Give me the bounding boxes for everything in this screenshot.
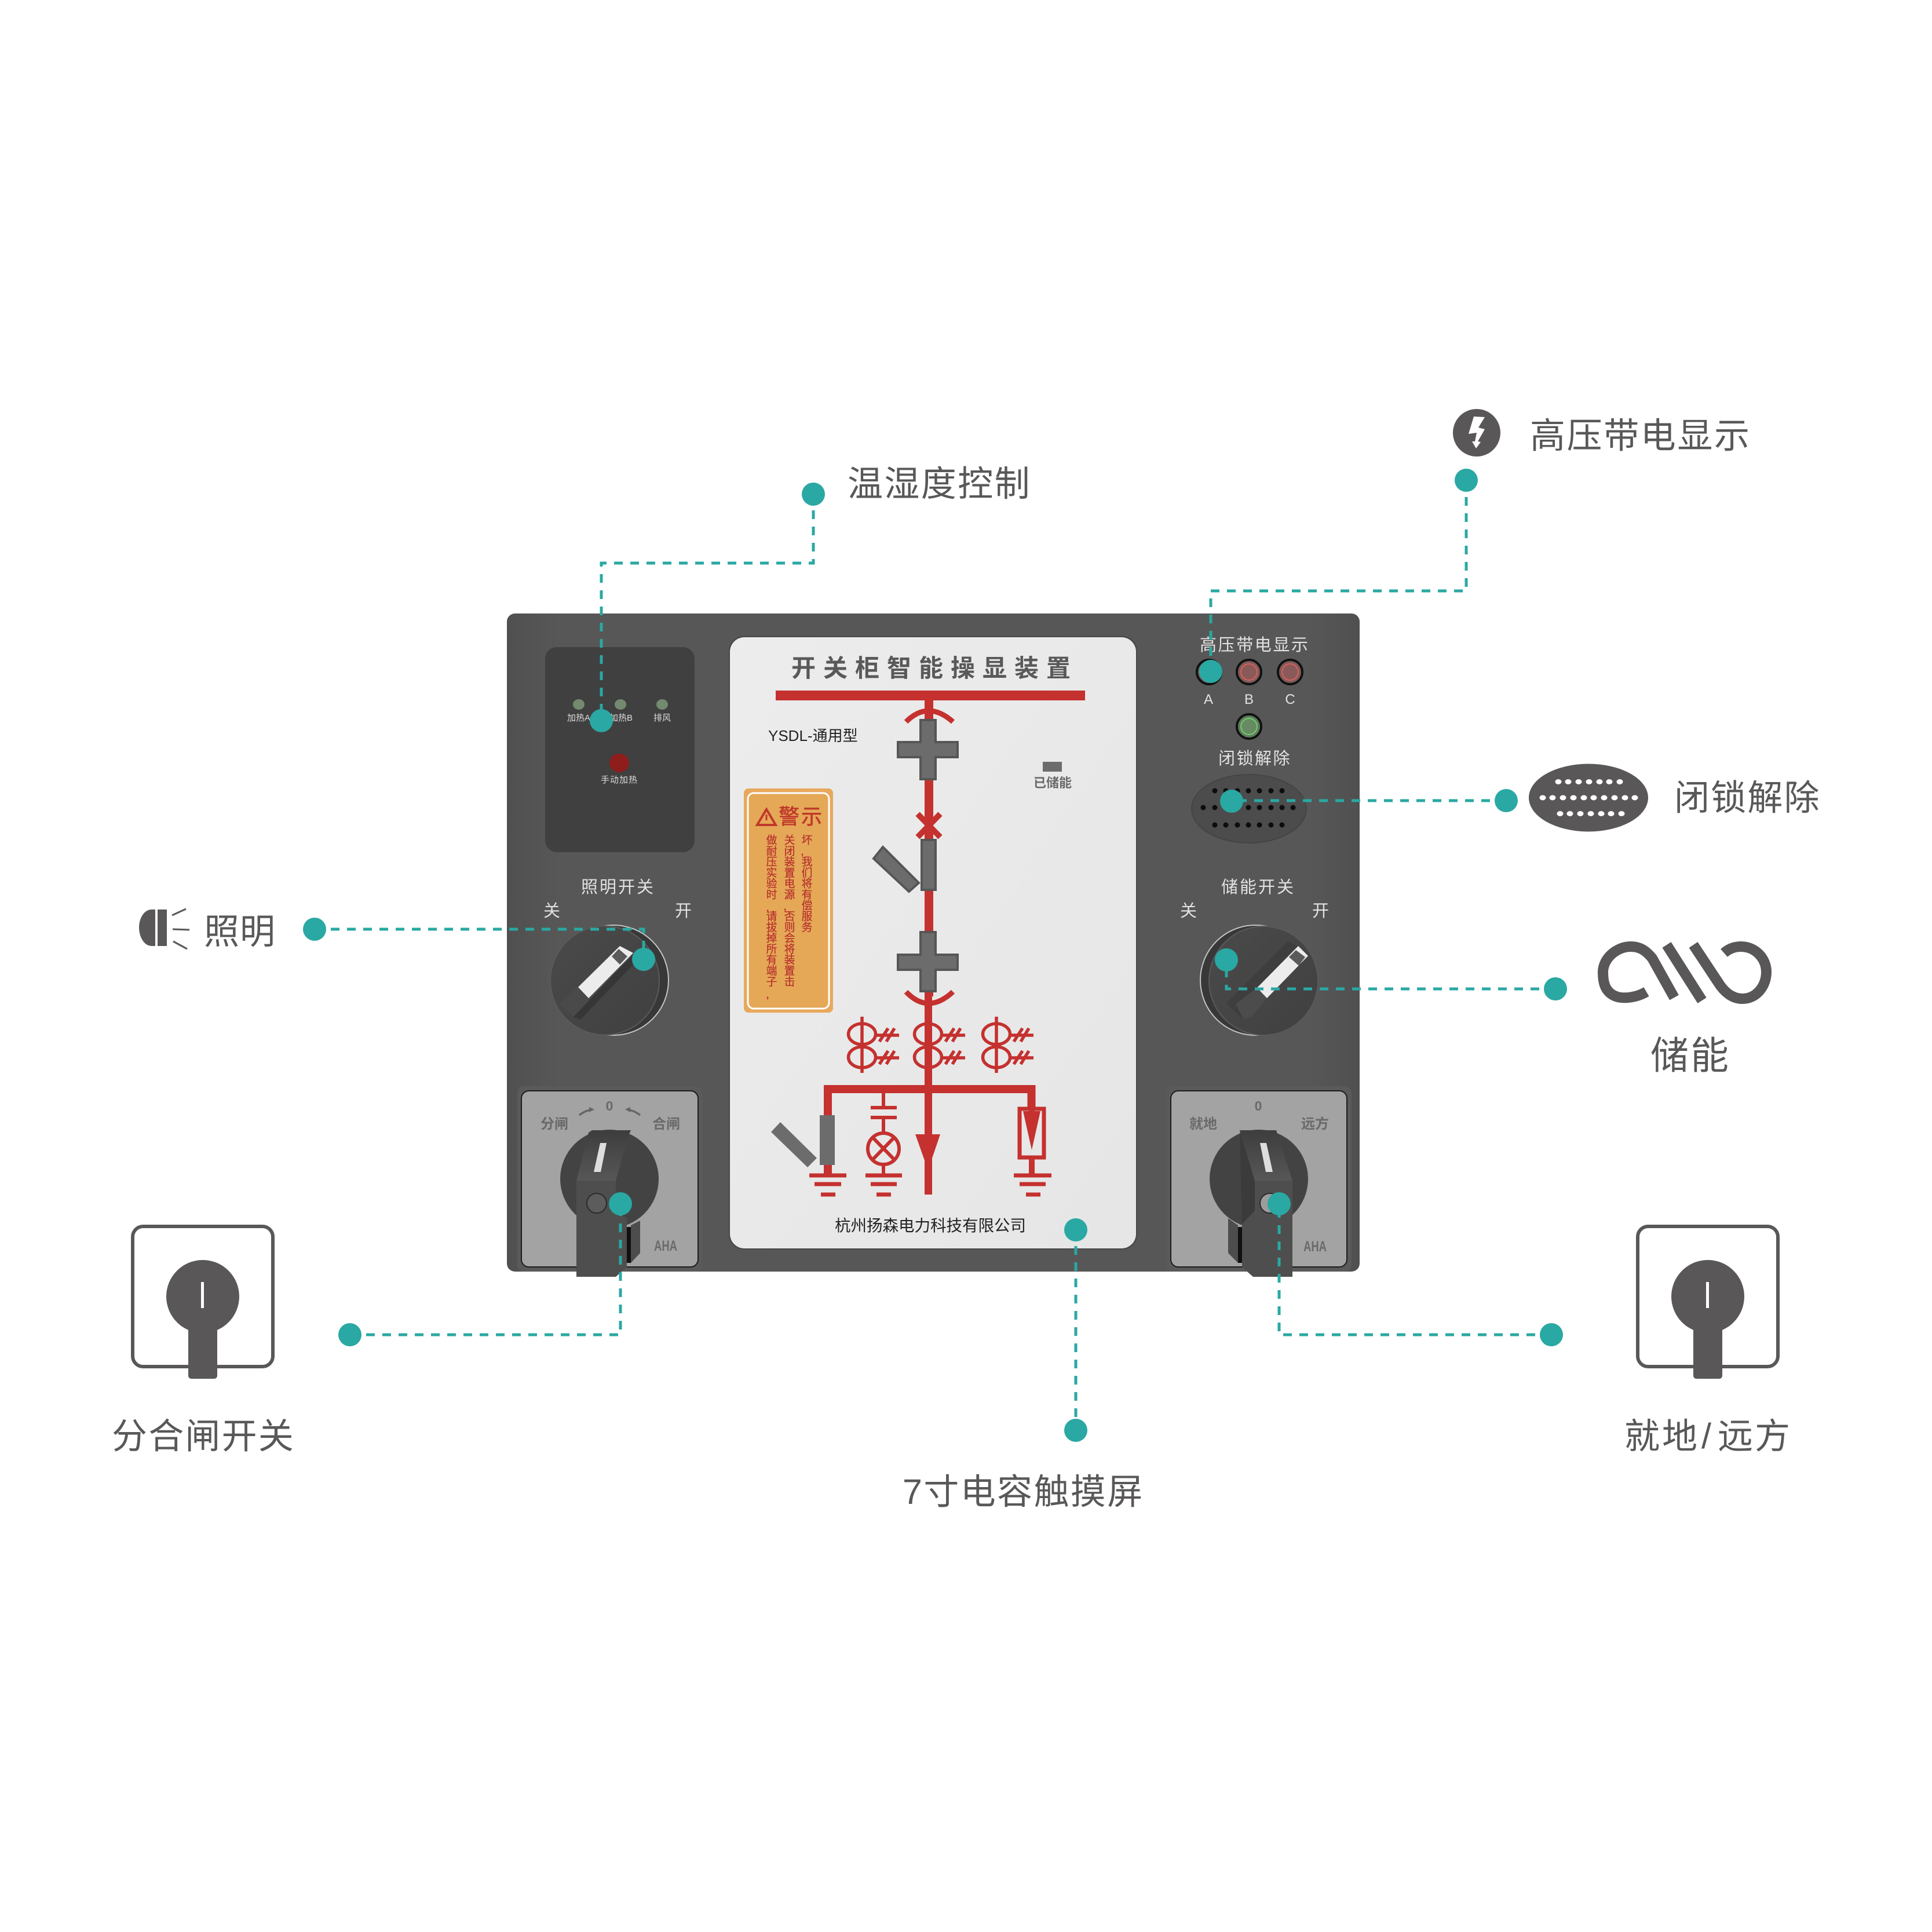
charged indicator: 已储能	[1033, 776, 1072, 790]
right plate: local/remote switch: 0	[1255, 1098, 1262, 1113]
energy storage switch captions: 储能开关	[1221, 878, 1295, 897]
company name: 杭州扬森电力科技有限公司	[835, 1217, 1026, 1235]
charged indicator	[1033, 762, 1072, 790]
label: temperature humidity control: 温湿度控制	[848, 464, 1031, 503]
icon: energy storage	[1603, 945, 1766, 1000]
warning label: ,	[784, 901, 786, 912]
warning label: 警示	[779, 805, 824, 828]
panel: heating control box	[545, 647, 695, 852]
right plate: local/remote switch: 远方	[1301, 1116, 1329, 1132]
right plate: local/remote switch: 就地	[1189, 1116, 1217, 1132]
current transformers	[848, 1017, 1033, 1073]
icon: lightning	[1453, 409, 1500, 456]
screen	[729, 636, 1137, 1250]
warning label: ,	[801, 846, 804, 857]
leader line: high voltage	[1211, 481, 1466, 671]
high-voltage indicator group	[1197, 636, 1310, 768]
panel: heating control box: 加热B	[609, 713, 633, 723]
label: touch screen: 7寸电容触摸屏	[903, 1472, 1144, 1511]
leader line: touch screen	[1074, 1230, 1078, 1430]
label: local remote: 就地/远方	[1624, 1416, 1790, 1456]
warning label: ,	[766, 903, 769, 914]
icon: lamp	[139, 909, 189, 949]
leader line: storage	[1226, 960, 1555, 989]
lighting switch captions	[543, 878, 692, 921]
warning label: 做耐压实验时 请拔掉所有端子	[765, 834, 777, 987]
panel: heating control box: 手动加热	[601, 775, 638, 785]
lighting switch captions: 关	[543, 901, 560, 921]
warning label: 坏 我们将有偿服务	[801, 834, 812, 932]
energy storage switch captions: 关	[1180, 901, 1197, 921]
high-voltage indicator group: C	[1285, 692, 1295, 707]
icon: switch right	[1638, 1226, 1778, 1379]
icon: switch left	[133, 1226, 273, 1379]
release socket	[1192, 775, 1306, 843]
energy storage switch captions: 开	[1312, 902, 1329, 921]
right plate: local/remote switch: AHA	[1303, 1239, 1327, 1255]
high-voltage indicator group: 闭锁解除	[1218, 749, 1291, 768]
high-voltage indicator group: B	[1244, 692, 1254, 707]
leader line: humidity control	[601, 494, 813, 721]
right plate: local/remote switch	[1166, 1086, 1352, 1277]
warning label: ,	[766, 989, 769, 1000]
left plate: open/close switch: 分闸	[540, 1116, 568, 1132]
high-voltage indicator group: A	[1204, 692, 1213, 707]
device panel	[507, 613, 1360, 1277]
model label: YSDL-通用型	[768, 727, 858, 744]
left plate: open/close switch: AHA	[654, 1238, 677, 1254]
lighting rotary knob	[550, 925, 669, 1035]
left plate: open/close switch: 合闸	[652, 1116, 680, 1132]
red bus bar	[776, 691, 1085, 700]
leader line: open/close	[350, 1204, 620, 1335]
label: open close switch: 分合闸开关	[112, 1416, 295, 1456]
energy storage switch captions	[1180, 878, 1329, 921]
high-voltage indicator group: 高压带电显示	[1200, 636, 1310, 655]
marker dots	[303, 469, 1567, 1442]
panel: heating control box: 排风	[653, 713, 671, 723]
label: high voltage display: 高压带电显示	[1530, 416, 1751, 455]
lighting switch captions: 开	[675, 902, 692, 921]
lighting switch captions: 照明开关	[581, 878, 655, 897]
leader line: release	[1232, 799, 1506, 802]
screen title: 开关柜智能操显装置	[791, 655, 1078, 682]
left plate: open/close switch	[517, 1086, 703, 1277]
label: release lock: 闭锁解除	[1674, 778, 1821, 817]
leader line: lighting	[315, 929, 644, 959]
panel: heating control box: 加热A	[567, 713, 590, 723]
leader line: local/remote	[1279, 1204, 1551, 1335]
energy storage rotary knob	[1200, 925, 1318, 1035]
left plate: open/close switch: 0	[606, 1098, 613, 1113]
single line diagram	[771, 700, 1051, 1195]
warning label: 关闭装置电源 否则会将装置击	[783, 834, 795, 987]
label: energy storage: 储能	[1650, 1034, 1730, 1077]
lower branches	[771, 1089, 1051, 1195]
warning label	[744, 788, 833, 1013]
label: lighting: 照明	[204, 912, 276, 951]
icon: socket	[1529, 764, 1648, 832]
